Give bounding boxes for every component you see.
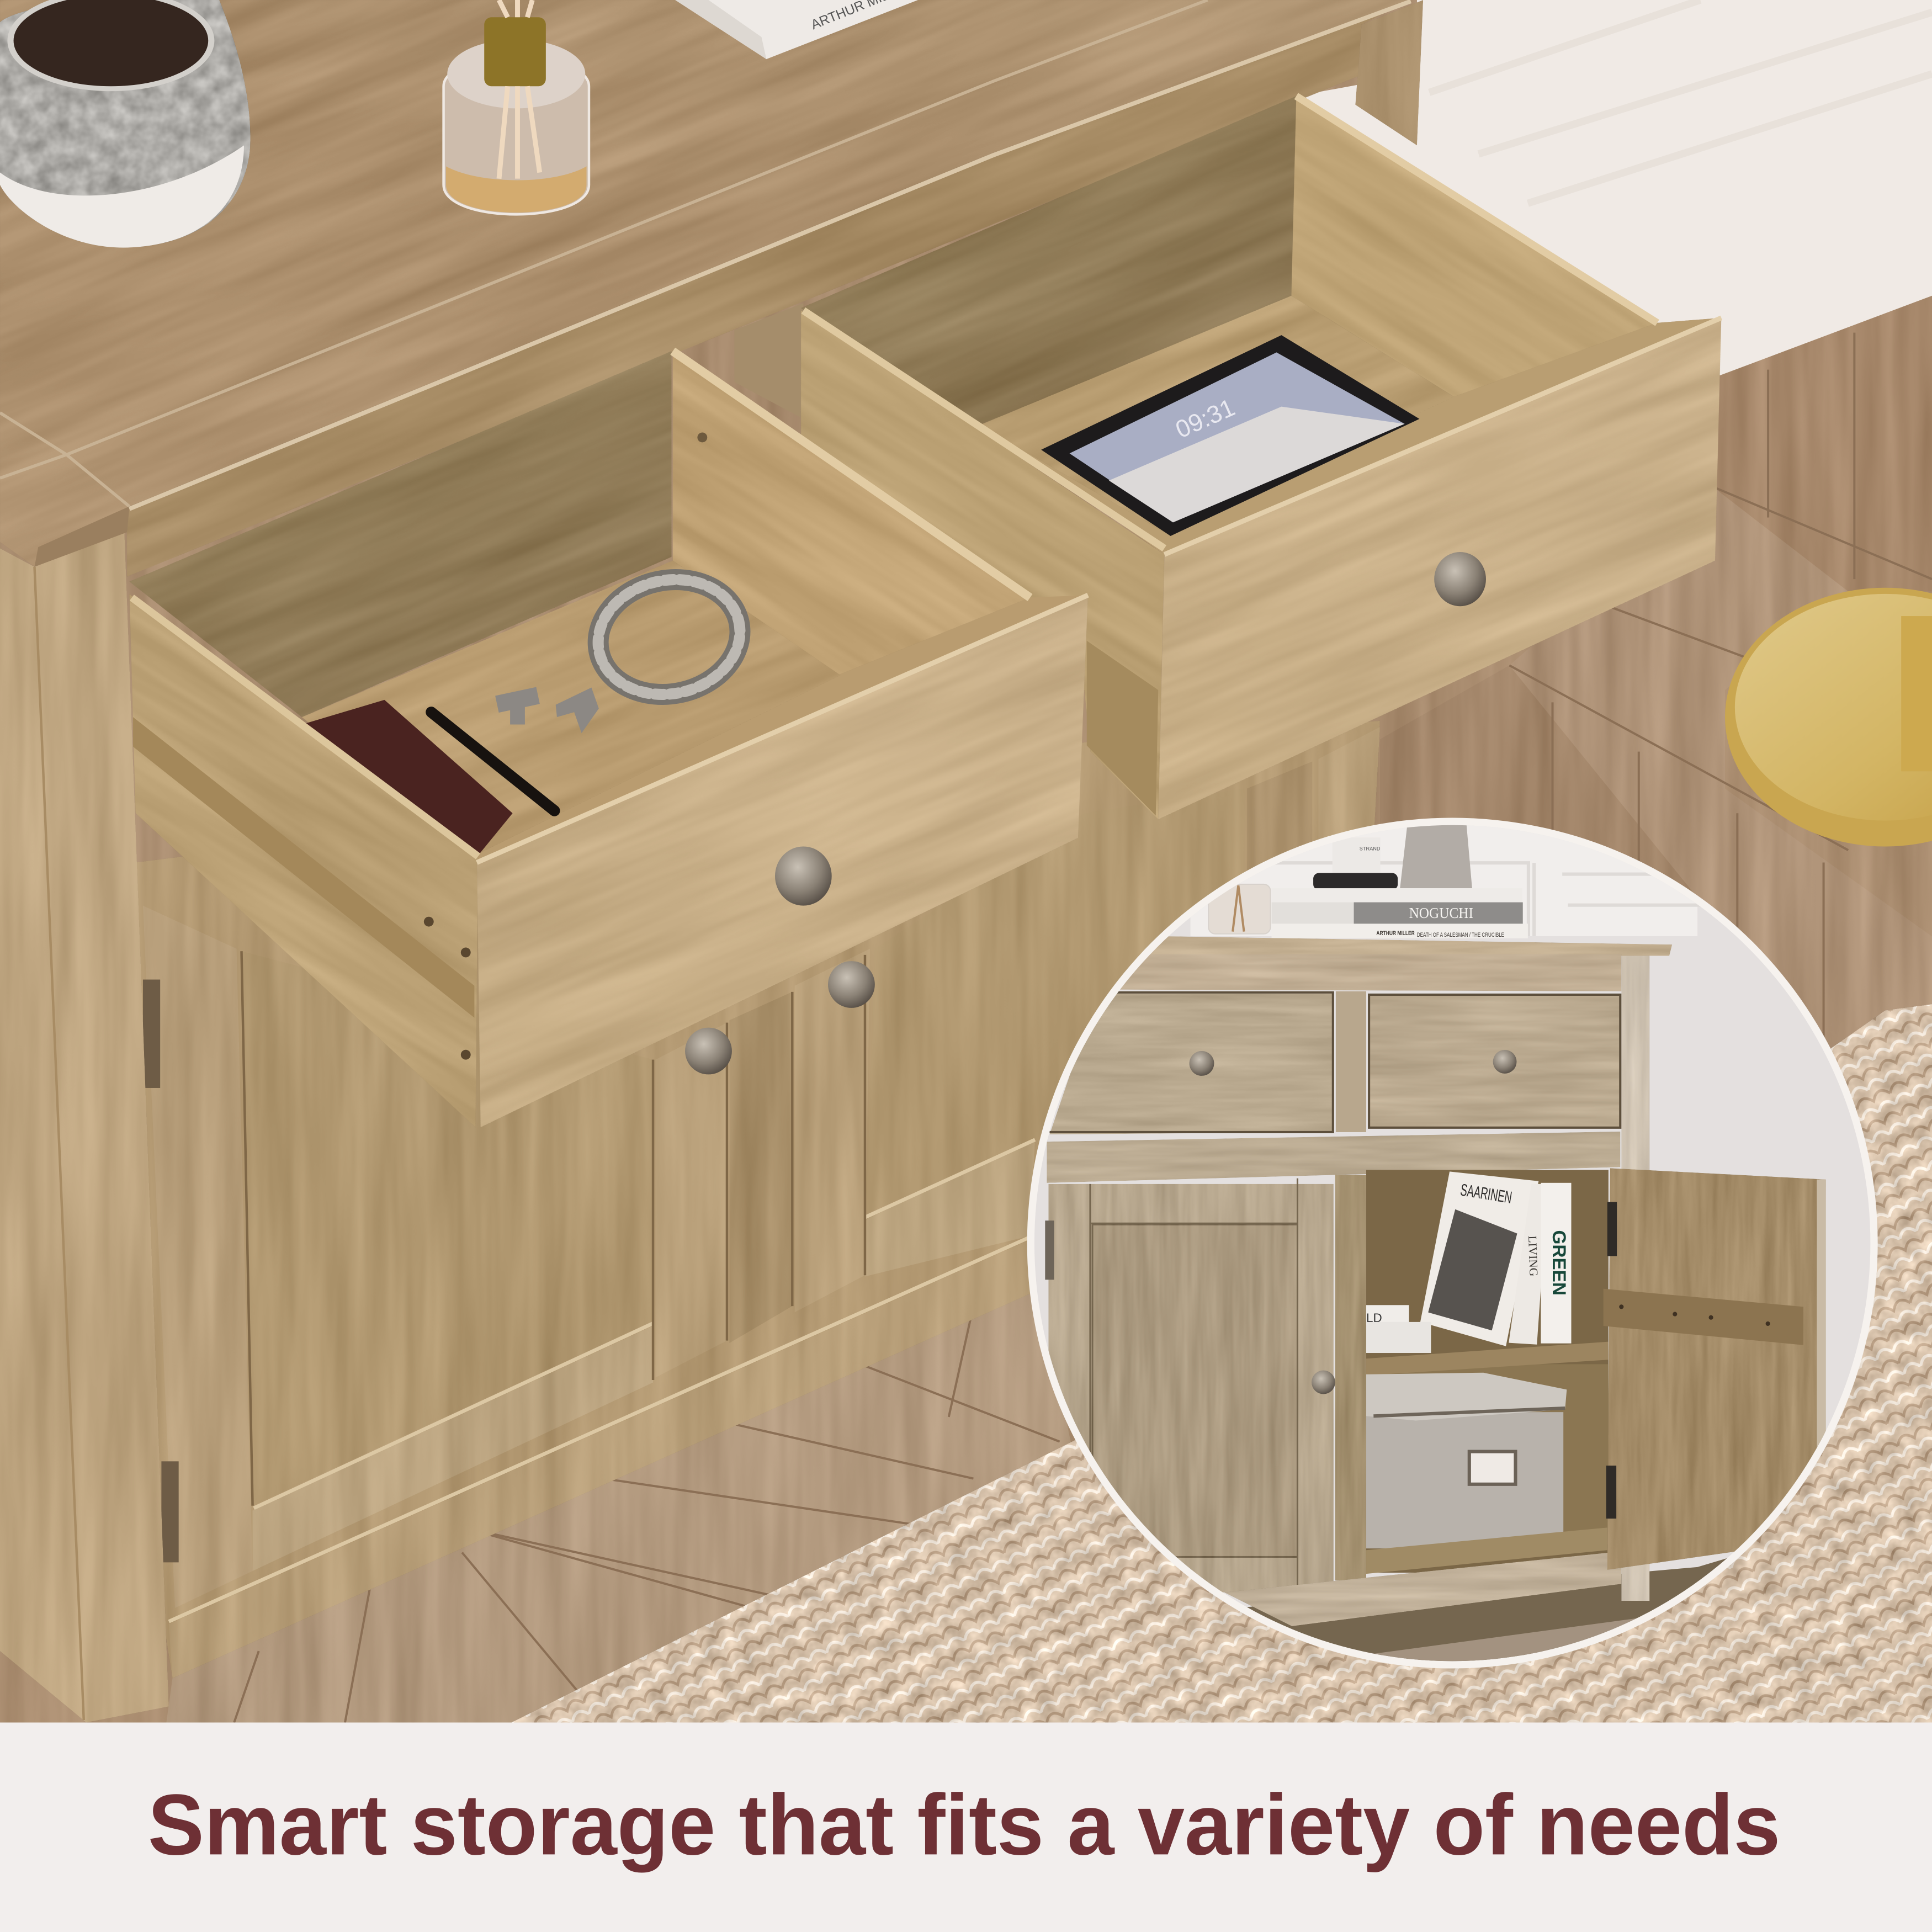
right door stile	[795, 949, 870, 1312]
inset right drawer	[1369, 995, 1620, 1128]
right door rail	[865, 1140, 1035, 1276]
inset book stack: DEATH OF A SALESMAN / THE CRUCIBLE	[1417, 932, 1504, 938]
left door panel	[242, 951, 653, 1506]
watch	[587, 567, 751, 707]
pen	[431, 712, 554, 811]
inset book stack: NOGUCHI	[1409, 904, 1473, 921]
circle white ring	[1027, 818, 1878, 1669]
inset books on shelf: LD	[1366, 1311, 1382, 1325]
inset interior	[1366, 1170, 1609, 1573]
cabinet top surface	[0, 0, 1607, 1057]
door knobs	[685, 961, 875, 1074]
inset left door	[1045, 1179, 1335, 1593]
inset books on shelf	[1366, 1171, 1571, 1353]
inset left drawer	[1049, 994, 1333, 1134]
drawer front	[984, 123, 1896, 1015]
right post	[1355, 0, 1423, 145]
inset circle: cabinet with open door	[1021, 801, 1905, 1684]
hinges	[143, 980, 179, 1562]
drawer floor	[200, 374, 942, 1039]
knob	[1434, 552, 1486, 606]
inset cabinet	[1045, 936, 1826, 1626]
apron	[0, 0, 1611, 1022]
inset floor	[1191, 1505, 1905, 1684]
right door panel	[865, 789, 1244, 1214]
inset diffuser	[1208, 884, 1271, 934]
cabinet lower body	[136, 721, 1380, 1678]
inset centre post	[1335, 1175, 1366, 1580]
inset books on shelf: GREEN	[1548, 1230, 1569, 1296]
inner right side	[527, 190, 1176, 836]
inset vase and candle: STRAND	[1360, 846, 1381, 852]
inset door batten	[1604, 1289, 1803, 1345]
left door outer stile	[143, 906, 253, 1608]
tablet	[1041, 335, 1419, 536]
cabinet base rail	[169, 1240, 1030, 1678]
top front ledge highlight	[129, 1, 1411, 509]
inset wall	[1021, 801, 1905, 1684]
inset shelf	[1366, 1342, 1609, 1376]
cabinet	[0, 0, 1611, 1723]
interior base fill	[980, 296, 1721, 554]
drawer front	[292, 383, 1273, 1340]
reed diffuser	[444, 0, 589, 214]
inner right side	[1156, 0, 1792, 561]
inset drawer knobs	[1190, 1050, 1516, 1076]
left side	[0, 437, 718, 1284]
inset top	[1126, 936, 1672, 956]
inset storage box	[1366, 1373, 1567, 1548]
right drawer	[572, 0, 1896, 1015]
inset books on shelf: LIVING	[1526, 1235, 1540, 1277]
inset book stack	[1272, 888, 1528, 938]
rug	[511, 1004, 1932, 1723]
inset books on shelf: SAARINEN	[1459, 1181, 1513, 1207]
left drawer	[0, 163, 1273, 1340]
back panel	[2, 163, 799, 905]
title: Smart storage that fits a variety of needs	[148, 1777, 1780, 1873]
left door right stile	[656, 1023, 727, 1378]
left door bottom rail	[253, 1326, 653, 1571]
inset rug sliver	[1348, 1618, 1697, 1684]
tablet: 09:31	[1172, 394, 1239, 444]
back panel	[687, 0, 1410, 597]
lamp: gold base	[1725, 588, 1932, 846]
bottom caption band	[0, 1723, 1932, 1932]
inset upper rail	[1120, 954, 1621, 991]
drawer floor	[898, 131, 1536, 697]
book stack on top	[675, 0, 918, 59]
potted plant	[0, 0, 251, 248]
left leg	[0, 532, 169, 1723]
inset lower rail	[1047, 1132, 1620, 1183]
inset door panel	[1092, 1224, 1298, 1557]
inset hinges	[1606, 1202, 1617, 1519]
wall and skirting	[1296, 0, 1932, 376]
inset vase and candle	[1313, 825, 1472, 890]
interior base fill	[302, 561, 1088, 862]
far posts	[1247, 761, 1312, 936]
knob	[775, 846, 832, 906]
inset side post	[1621, 956, 1649, 1601]
inset base rail	[1224, 1551, 1621, 1626]
cufflinks	[495, 687, 599, 733]
inset divider	[1336, 991, 1366, 1132]
inset book stack: ARTHUR MILLER	[1376, 930, 1415, 937]
inset open door	[1607, 1168, 1826, 1570]
left side	[572, 147, 1393, 983]
inset lower shelf	[1366, 1527, 1607, 1574]
divider post	[734, 303, 803, 419]
notebook	[302, 700, 513, 860]
centre post	[729, 992, 792, 1343]
